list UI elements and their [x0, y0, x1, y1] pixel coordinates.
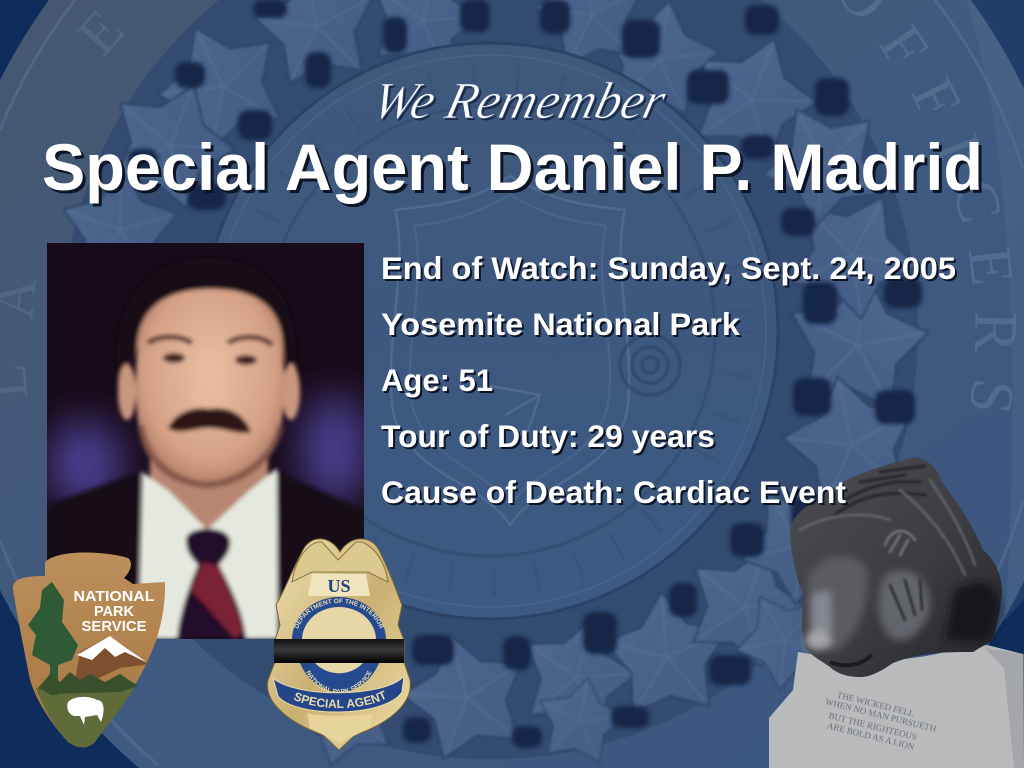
tree — [28, 582, 78, 695]
age: Age: 51 — [383, 364, 495, 400]
mourning band — [274, 639, 404, 663]
end of watch: End of Watch: Sunday, Sept. 24, 2005 — [383, 252, 958, 288]
suit — [47, 471, 143, 584]
seal lettering — [0, 0, 1016, 410]
bison — [67, 697, 104, 725]
name heading: Special Agent Daniel P. Madrid — [42, 130, 983, 204]
badge US panel — [308, 574, 370, 596]
treeline — [38, 672, 138, 694]
cause of death: Cause of Death: Cardiac Event — [381, 474, 847, 510]
icon: special agent badge — [267, 538, 411, 750]
inscription: THE WICKED FELL — [836, 690, 915, 719]
tie — [177, 529, 246, 639]
portrait photo — [47, 243, 369, 639]
badge seal ring — [292, 597, 386, 640]
tour of duty: Tour of Duty: 29 years — [383, 420, 717, 456]
eagle — [292, 542, 388, 582]
icon: special agent badge: DEPARTMENT OF THE INTERIOR — [294, 598, 384, 629]
lion face — [808, 556, 868, 650]
stone plinth — [769, 645, 1024, 768]
inner disc — [202, 43, 778, 619]
shirt — [138, 468, 278, 639]
memorial heading — [42, 73, 986, 207]
logo wordmark: PARK — [94, 603, 134, 620]
star band shadows — [128, 0, 922, 748]
age: Age: 51 — [381, 362, 493, 398]
icon: National Park Service arrowhead — [13, 552, 165, 747]
inscription: ARE BOLD AS A LION — [826, 720, 916, 752]
location: Yosemite National Park — [381, 306, 740, 342]
logo wordmark: NATIONAL — [74, 588, 154, 605]
badge US: US — [327, 576, 351, 596]
icon: special agent badge: SPECIAL AGENT — [294, 690, 385, 708]
script heading: We Remember: We Remember — [369, 75, 674, 132]
lion back — [945, 583, 1000, 640]
details list — [381, 250, 958, 512]
eyes — [163, 353, 185, 363]
nose — [192, 350, 230, 408]
mane streaks — [800, 466, 975, 620]
inscription: BUT THE RIGHTEOUS — [828, 710, 918, 742]
icon: special agent badge: NATIONAL PARK SERVICE — [306, 670, 372, 692]
banner — [273, 676, 404, 712]
brows — [148, 337, 272, 345]
inscription: WHEN NO MAN PURSUETH — [824, 696, 938, 734]
lion cheek mane — [879, 571, 930, 640]
location: Yosemite National Park — [383, 308, 742, 344]
tour of duty: Tour of Duty: 29 years — [381, 418, 715, 454]
hair — [116, 284, 298, 384]
badge seal centre — [301, 607, 377, 673]
mustache — [168, 408, 251, 433]
cause of death: Cause of Death: Cardiac Event — [383, 476, 849, 512]
icon: lion statue on stone — [769, 457, 1024, 768]
ears — [118, 364, 136, 420]
name heading: Special Agent Daniel P. Madrid — [45, 133, 986, 207]
end of watch: End of Watch: Sunday, Sept. 24, 2005 — [381, 250, 956, 286]
lion snout — [812, 590, 832, 640]
face — [136, 289, 284, 488]
beard shadow — [141, 425, 281, 485]
central shield — [391, 176, 629, 525]
logo wordmark: SERVICE — [82, 618, 146, 635]
inscription — [824, 690, 938, 752]
lion body — [790, 457, 1002, 677]
mountain — [75, 636, 150, 680]
script heading: We Remember: We Remember — [367, 73, 672, 130]
logo wordmark — [74, 588, 154, 635]
rose emblem — [620, 335, 680, 395]
neck — [146, 457, 272, 534]
name plate — [307, 713, 372, 743]
